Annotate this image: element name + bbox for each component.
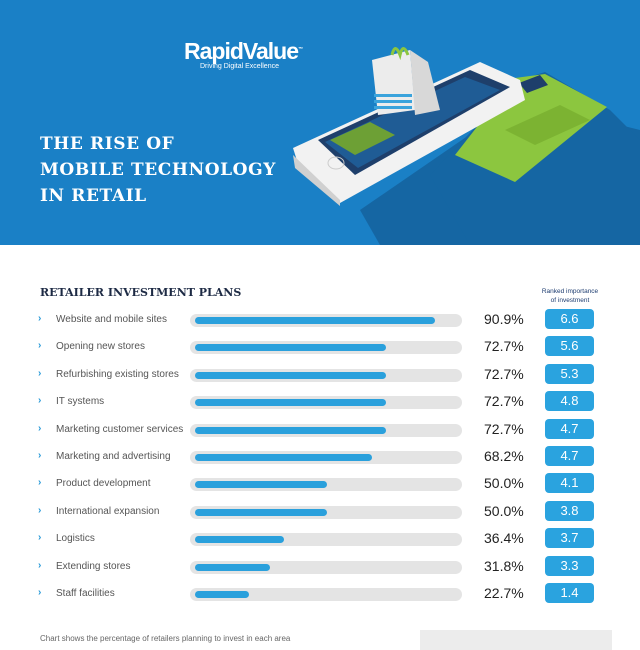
header banner [0,0,640,245]
bar chart: 5.6 [560,338,579,353]
logo: RapidValue™ [184,38,302,64]
title: IN RETAIL [40,186,147,206]
column header: of investment [551,297,589,304]
bar chart: › [38,477,41,488]
bar chart: 50.0% [484,503,524,519]
bar chart: 31.8% [484,558,524,574]
column header [542,288,598,304]
bar chart: 4.8 [560,393,579,408]
bar chart [38,309,594,603]
bar chart: Staff facilities [56,588,115,599]
bar chart: 4.7 [560,448,579,463]
bar chart: 3.3 [560,558,579,573]
title [40,134,276,206]
bar chart: › [38,532,41,543]
bar chart: Marketing and advertising [56,451,171,462]
bar chart: Refurbishing existing stores [56,369,179,380]
bar chart: 3.8 [560,503,579,518]
bar chart: 22.7% [484,585,524,601]
bar chart: › [38,423,41,434]
bar chart: 5.3 [560,366,579,381]
section heading: RETAILER INVESTMENT PLANS [40,286,241,299]
bar chart: IT systems [56,396,104,407]
bar chart: 3.7 [560,530,579,545]
bar chart: › [38,560,41,571]
bar chart: › [38,368,41,379]
bar chart: International expansion [56,506,159,517]
bar chart: Extending stores [56,561,130,572]
bar chart: 68.2% [484,448,524,464]
bar chart: › [38,450,41,461]
bar chart: › [38,395,41,406]
bar chart: 50.0% [484,475,524,491]
bar chart: Marketing customer services [56,424,183,435]
footer text: Chart shows the percentage of retailers planning to invest in each area [40,634,290,643]
logo: Driving Digital Excellence [200,63,279,70]
bar chart: Opening new stores [56,341,145,352]
bar chart: Logistics [56,533,95,544]
bar chart: Product development [56,478,151,489]
bar chart: 72.7% [484,393,524,409]
bar chart: 36.4% [484,530,524,546]
bar chart: Website and mobile sites [56,314,167,325]
illustration: phone, bag and card [293,47,640,245]
bar chart: › [38,340,41,351]
bar chart: 1.4 [560,585,579,600]
bar chart: › [38,587,41,598]
bar chart: 6.6 [560,311,579,326]
column header: Ranked importance [542,288,598,295]
title: MOBILE TECHNOLOGY [40,160,276,180]
title: THE RISE OF [40,134,174,154]
bar chart: › [38,505,41,516]
bar chart: 4.1 [560,475,579,490]
bar chart: 4.7 [560,421,579,436]
bar chart: 72.7% [484,421,524,437]
footer gray panel [420,630,612,650]
bar chart: 72.7% [484,366,524,382]
bar chart: 90.9% [484,311,524,327]
bar chart: › [38,313,41,324]
bar chart: 72.7% [484,338,524,354]
